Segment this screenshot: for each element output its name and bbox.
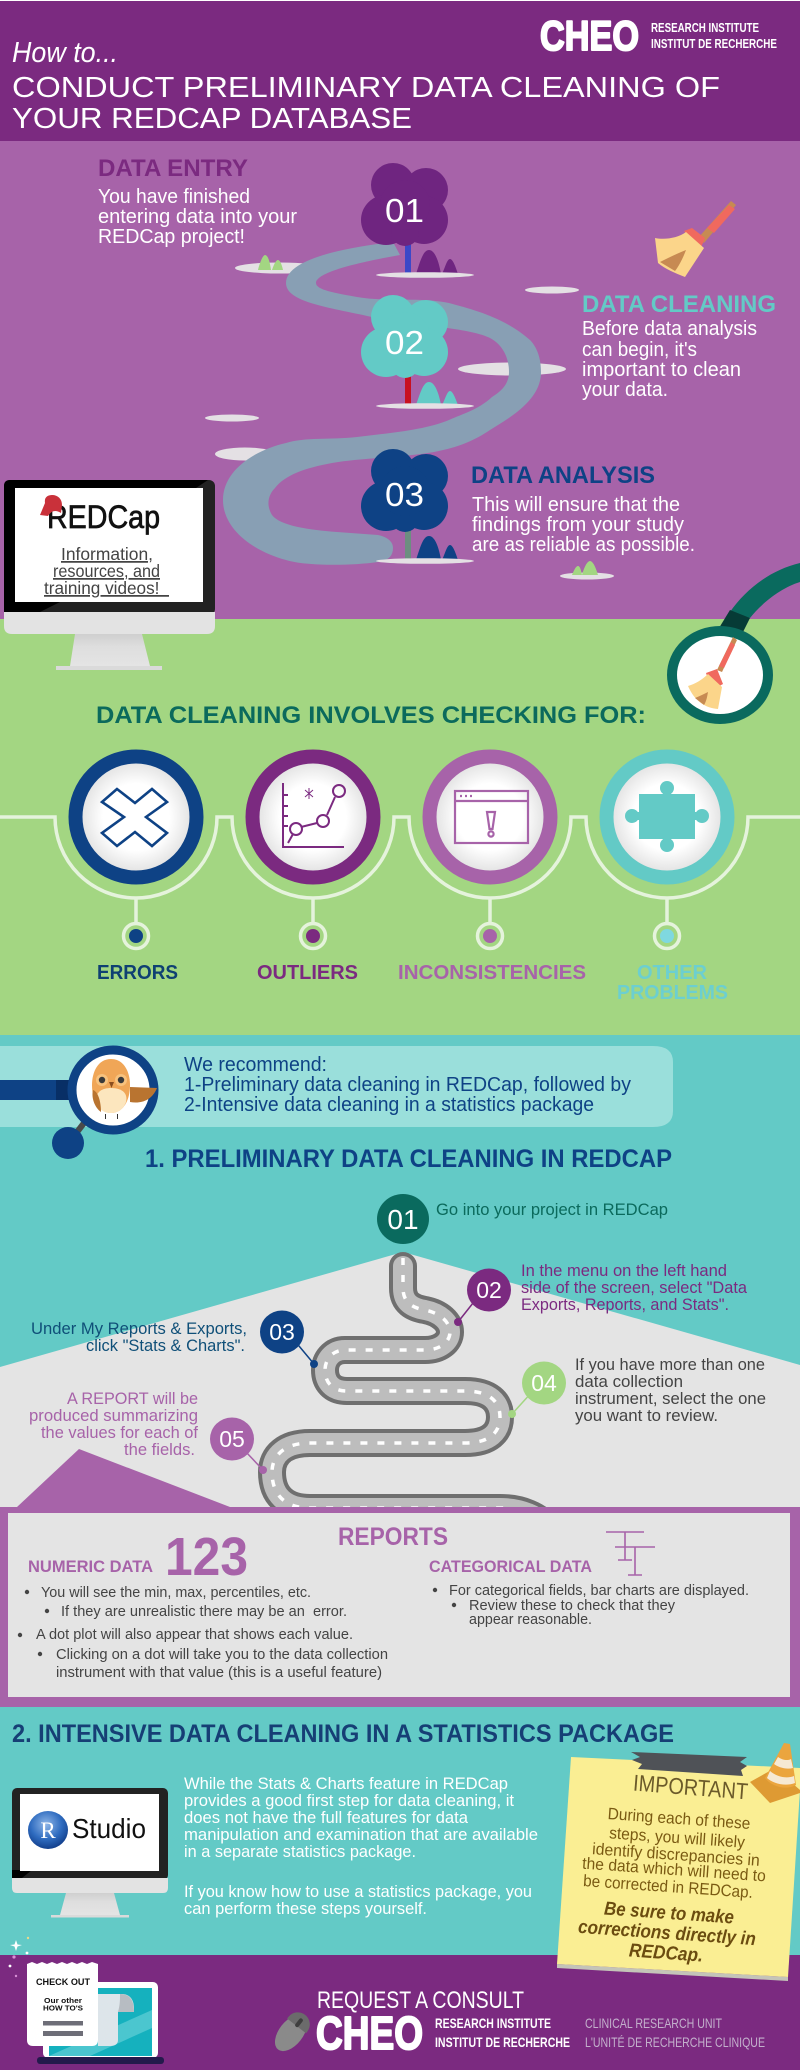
river path — [223, 242, 541, 565]
numeric data bullets: A dot plot will also appear that shows each value. — [36, 1626, 353, 1643]
heading: DATA CLEANING INVOLVES CHECKING FOR: — [96, 702, 646, 729]
logo: R — [28, 1811, 68, 1849]
note body — [582, 1805, 766, 1902]
icon: red cap — [40, 495, 62, 516]
numeric data bullets: instrument with that value (this is a useful feature) — [56, 1664, 382, 1681]
text: data cleaning: important to clean — [582, 359, 741, 381]
step 01: 01 — [387, 1204, 419, 1235]
note heading: IMPORTANT — [632, 1770, 749, 1804]
step 02: Exports, Reports, and Stats". — [521, 1295, 729, 1314]
step 04: instrument, select the one — [575, 1389, 766, 1408]
panel: footer — [0, 1937, 800, 2070]
step 04: you want to review. — [575, 1406, 718, 1425]
logo text: research institute: INSTITUT DE RECHERCHE — [435, 2034, 570, 2050]
heading: reports: REPORTS — [338, 1523, 448, 1551]
title: main heading — [12, 72, 720, 135]
text: data cleaning: your data. — [582, 379, 668, 401]
title: how to: How to... — [12, 37, 118, 69]
title: main heading: CONDUCT PRELIMINARY DATA CLEANING OF — [12, 72, 720, 104]
text: statistics package — [184, 1774, 538, 1918]
tree 02: 02 — [385, 324, 424, 361]
icon: typography — [606, 1532, 655, 1575]
panel: recommendation — [0, 1046, 673, 1159]
note body: be corrected in REDCap. — [583, 1872, 753, 1902]
note body: identify discrepancies in — [592, 1840, 760, 1870]
monitor: REDCap link — [4, 480, 215, 670]
icon: broom — [655, 201, 736, 277]
step 04: 04 — [531, 1370, 557, 1396]
item: outliers: OUTLIERS — [257, 962, 358, 984]
icon: magnifier with broom — [672, 563, 800, 719]
step 05: the values for each of — [41, 1423, 198, 1442]
text: clinical research unit — [585, 2015, 765, 2050]
note callout: corrections directly in — [577, 1917, 756, 1950]
step 02 — [454, 1261, 748, 1326]
item: other problems — [606, 756, 728, 1004]
item: other problems: PROBLEMS — [617, 982, 728, 1004]
item: outliers — [252, 756, 374, 984]
step 02: side of the screen, select "Data — [521, 1278, 748, 1297]
numeric data bullets: If they are unrealistic there may be an error. — [61, 1603, 347, 1620]
logo: CHEO: CHEO — [316, 2007, 423, 2059]
item: inconsistencies: INCONSISTENCIES — [398, 962, 586, 984]
tree 02 — [361, 295, 474, 409]
call to action: request a consult: REQUEST A CONSULT — [317, 1987, 524, 2014]
numeric data heading: 123 — [165, 1527, 248, 1587]
tape — [631, 1752, 747, 1776]
categorical data bullets: Review these to check that they — [469, 1597, 675, 1614]
text: data cleaning — [582, 291, 776, 401]
illustration: check out how to's: HOW TO'S — [43, 2004, 83, 2012]
text: data analysis: are as reliable as possible. — [472, 534, 695, 556]
text: data entry: REDCap project! — [98, 226, 245, 248]
logo: CHEO research institute — [540, 12, 777, 59]
step 05: 05 — [219, 1426, 245, 1452]
text: data analysis: DATA ANALYSIS — [471, 462, 655, 489]
step 05: produced summarizing — [29, 1406, 198, 1425]
panel: header — [0, 1, 800, 141]
logo: CHEO research institute: CHEO — [540, 12, 639, 59]
step 03 — [31, 1310, 318, 1368]
text: data analysis — [471, 462, 695, 556]
panel: roadmap — [0, 1194, 800, 1530]
note callout: REDCap. — [628, 1940, 704, 1967]
icon: x — [102, 789, 167, 846]
text: statistics package: manipulation and examination that are available — [184, 1825, 538, 1844]
panel: data journey — [98, 155, 776, 580]
logo text: research institute: RESEARCH INSTITUTE — [435, 2015, 551, 2031]
numeric data heading — [28, 1527, 248, 1587]
text: statistics package: does not have the full features for data — [184, 1808, 469, 1827]
step 05 — [29, 1389, 267, 1474]
logo: Studio: Studio — [72, 1813, 146, 1844]
categorical data bullets — [433, 1582, 749, 1628]
icon: puzzle piece — [625, 781, 709, 852]
step 03: Under My Reports & Exports, — [31, 1319, 247, 1338]
link text: training videos! — [44, 578, 169, 598]
text: statistics package: in a separate statistics package. — [184, 1842, 416, 1861]
link text: Information, — [61, 544, 153, 564]
item: other problems: OTHER — [637, 962, 708, 984]
logo: R: R — [40, 1818, 56, 1843]
illustration: check out how to's: CHECK OUT — [36, 1977, 90, 1988]
link text — [44, 544, 169, 598]
item: errors: ERRORS — [97, 962, 178, 984]
text: data cleaning: can begin, it's — [582, 339, 697, 361]
panel: reports — [0, 1507, 800, 1707]
text: data entry: entering data into your — [98, 206, 297, 228]
numeric data bullets: You will see the min, max, percentiles, etc. — [41, 1584, 311, 1601]
icon: mouse — [269, 2007, 315, 2057]
step 01 — [377, 1194, 668, 1244]
link text: resources, and — [53, 561, 160, 581]
sparkles — [9, 1937, 29, 1977]
note callout: Be sure to make — [603, 1898, 735, 1929]
step 02: 02 — [476, 1277, 502, 1303]
islands — [205, 255, 614, 580]
step 03: click "Stats & Charts". — [86, 1336, 245, 1355]
illustration: check out how to's: Our other — [44, 1996, 82, 2005]
text: we recommend — [184, 1054, 631, 1116]
connector line — [0, 817, 800, 898]
note callout — [577, 1898, 756, 1967]
heading: intensive data cleaning: 2. INTENSIVE DATA CLEANING IN A STATISTICS PACKAGE — [12, 1720, 674, 1748]
title: main heading: YOUR REDCAP DATABASE — [12, 103, 412, 135]
categorical data bullets: appear reasonable. — [469, 1611, 592, 1628]
text: we recommend: 1-Preliminary data cleaning in REDCap, followed by — [184, 1074, 631, 1096]
text: data analysis: This will ensure that the — [472, 494, 680, 516]
text: statistics package: provides a good first step for data cleaning, it — [184, 1791, 514, 1810]
monitor: RStudio — [12, 1788, 168, 1918]
illustration: check out how to's — [27, 1962, 164, 2064]
step 05: the fields. — [124, 1440, 195, 1459]
icon: magnifier with owl — [52, 1050, 157, 1159]
logo text: research institute — [435, 2015, 570, 2050]
tree 03 — [361, 449, 474, 564]
step 04: If you have more than one — [575, 1355, 765, 1374]
step 02: In the menu on the left hand — [521, 1261, 727, 1280]
step 04: data collection — [575, 1372, 683, 1391]
step 04 — [508, 1355, 766, 1425]
text: data entry: You have finished — [98, 186, 250, 208]
logo: CHEO research institute: RESEARCH INSTITUTE — [651, 21, 759, 35]
numeric data heading: NUMERIC DATA — [28, 1557, 153, 1576]
tree 03: 03 — [385, 476, 424, 513]
tree 01: 01 — [385, 192, 424, 229]
panel: checking for — [0, 563, 800, 1004]
text: data entry — [98, 155, 297, 248]
item: inconsistencies — [398, 756, 586, 984]
text: data cleaning: Before data analysis — [582, 318, 757, 340]
panel: important note — [557, 1743, 800, 1981]
icon: alert window — [455, 791, 528, 843]
logo: REDCap wordmark: REDCap — [47, 499, 160, 535]
text: clinical research unit: CLINICAL RESEARCH UNIT — [585, 2015, 722, 2031]
road — [272, 1258, 550, 1530]
text: statistics package: If you know how to use a statistics package, you — [184, 1882, 532, 1901]
note body: the data which will need to — [582, 1855, 766, 1885]
step 01: Go into your project in REDCap — [436, 1200, 668, 1219]
step 05: A REPORT will be — [67, 1389, 198, 1408]
item: errors — [76, 756, 196, 984]
tree 01 — [361, 163, 474, 278]
text: statistics package: can perform these steps yourself. — [184, 1899, 427, 1918]
text: we recommend: We recommend: — [184, 1054, 327, 1076]
heading: preliminary data cleaning: 1. PRELIMINARY DATA CLEANING IN REDCAP — [145, 1145, 672, 1173]
text: statistics package: While the Stats & Charts feature in REDCap — [184, 1774, 508, 1793]
icon: traffic cone — [750, 1743, 800, 1803]
categorical data bullets: For categorical fields, bar charts are displayed. — [449, 1582, 749, 1599]
text: data entry: DATA ENTRY — [98, 155, 248, 182]
text: data analysis: findings from your study — [472, 514, 684, 536]
numeric data bullets: Clicking on a dot will take you to the data collection — [56, 1646, 388, 1663]
step 03: 03 — [269, 1319, 295, 1345]
note body: During each of these — [607, 1805, 751, 1833]
text: data cleaning: DATA CLEANING — [582, 291, 776, 318]
text: we recommend: 2-Intensive data cleaning in a statistics package — [184, 1094, 594, 1116]
numeric data bullets — [18, 1584, 388, 1681]
note body: steps, you will likely — [609, 1824, 746, 1852]
icon: line chart — [283, 783, 345, 847]
categorical data heading: CATEGORICAL DATA — [429, 1557, 592, 1576]
